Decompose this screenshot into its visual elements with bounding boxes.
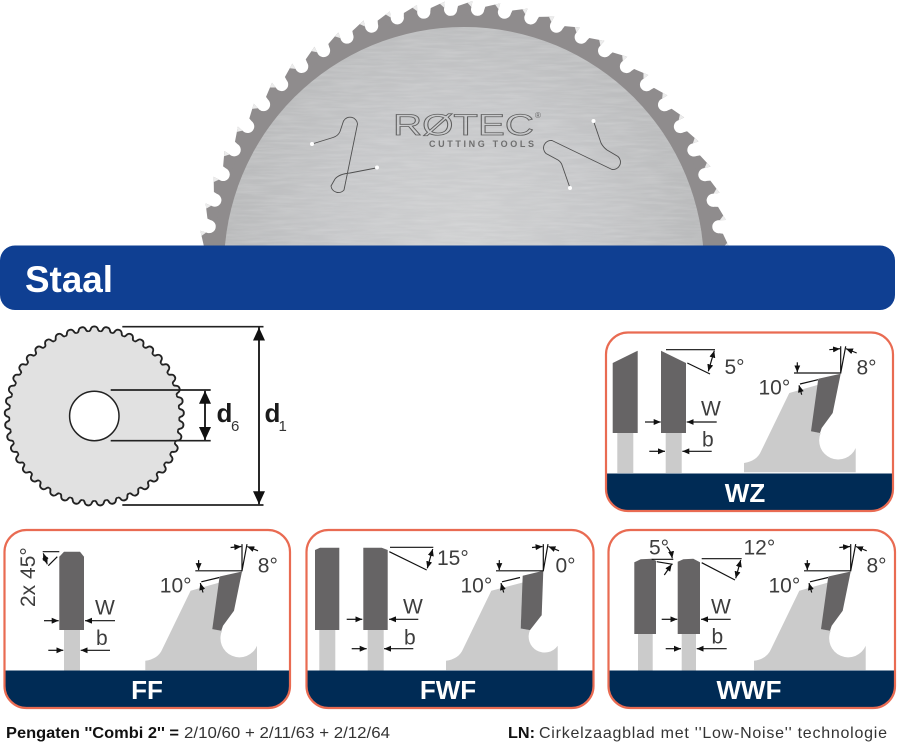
tooth front view WWF [634, 536, 775, 670]
panel frame [4, 530, 290, 708]
panel: FF [4, 530, 290, 708]
tooth side view WWF: 10° [768, 574, 800, 597]
tooth front view WZ [613, 350, 745, 473]
d6 dimension: 6 [231, 418, 239, 435]
label band FF [4, 670, 290, 708]
slot end dots [310, 119, 596, 190]
tooth front view WZ: 5° [724, 356, 745, 379]
tooth front view FWF [315, 547, 469, 670]
logo [396, 112, 541, 147]
tooth front view WWF: 5° [649, 536, 669, 560]
label band FWF [306, 670, 594, 708]
tooth side view WZ: 8° [856, 357, 877, 380]
tooth front view WWF: b [712, 626, 723, 648]
tooth front view FWF: b [404, 626, 416, 650]
tooth side view WWF [754, 544, 887, 670]
d1 dimension [122, 327, 287, 505]
title bar [0, 246, 895, 310]
footnote: pengaten: Pengaten ''Combi 2'' = [6, 725, 179, 742]
saw blade photo [200, 1, 728, 246]
tooth front view FF: 2x 45° [17, 547, 40, 607]
label FF: FF [131, 675, 163, 705]
tooth front view WZ: W [701, 398, 721, 420]
tooth side view WWF: 8° [866, 554, 887, 577]
blade teeth [200, 1, 728, 246]
tooth side view FWF [446, 544, 576, 670]
panel: WZ [606, 332, 893, 511]
label WZ: WZ [725, 478, 765, 508]
slot left [312, 117, 376, 192]
tooth side view WZ [744, 346, 877, 472]
tooth side view WZ: 10° [758, 377, 790, 400]
tooth side view FF [145, 544, 278, 670]
title: Staal [25, 259, 113, 300]
label band WWF [608, 670, 895, 708]
label WWF: WWF [717, 675, 781, 705]
panel frame [608, 530, 895, 708]
blade body disc [225, 27, 703, 246]
footnote: LN: LN: [508, 725, 535, 742]
d6 dimension: d [216, 398, 232, 428]
tooth front view FF: b [96, 627, 108, 650]
tooth front view FWF: 15° [437, 547, 469, 570]
logo: CUTTING TOOLS [429, 139, 534, 149]
tooth front view FF: W [95, 596, 115, 620]
footnote: pengaten: 2/10/60 + 2/11/63 + 2/12/64 [184, 725, 390, 742]
tooth front view WWF: W [711, 596, 731, 618]
gear dimension diagram [0, 314, 287, 518]
gear [0, 314, 192, 518]
tooth side view FWF: 10° [460, 574, 492, 597]
tooth side view FF: 10° [160, 574, 192, 597]
panel: WWF [608, 530, 895, 708]
label FWF: FWF [420, 675, 476, 705]
d6 dimension [111, 390, 239, 441]
footnote: pengaten [6, 725, 390, 742]
label band WZ [606, 474, 893, 511]
tooth front view WZ: b [702, 428, 714, 452]
logo: ® [535, 111, 541, 120]
tooth side view FF: 8° [258, 554, 278, 577]
slot right [544, 121, 620, 188]
logo: RØTEC [393, 109, 534, 142]
d1 dimension: d [264, 398, 280, 428]
panel frame [606, 332, 893, 511]
tooth side view FWF: 0° [556, 554, 576, 577]
panel frame [306, 530, 594, 708]
tooth front view WWF: 12° [744, 536, 775, 560]
panel: FWF [306, 530, 594, 708]
tooth front view FWF: W [403, 596, 423, 618]
tooth front view FF [17, 547, 115, 670]
d1 dimension: 1 [278, 418, 287, 435]
footnote: LN: Cirkelzaagblad met ''Low-Noise'' technologie [539, 725, 887, 742]
